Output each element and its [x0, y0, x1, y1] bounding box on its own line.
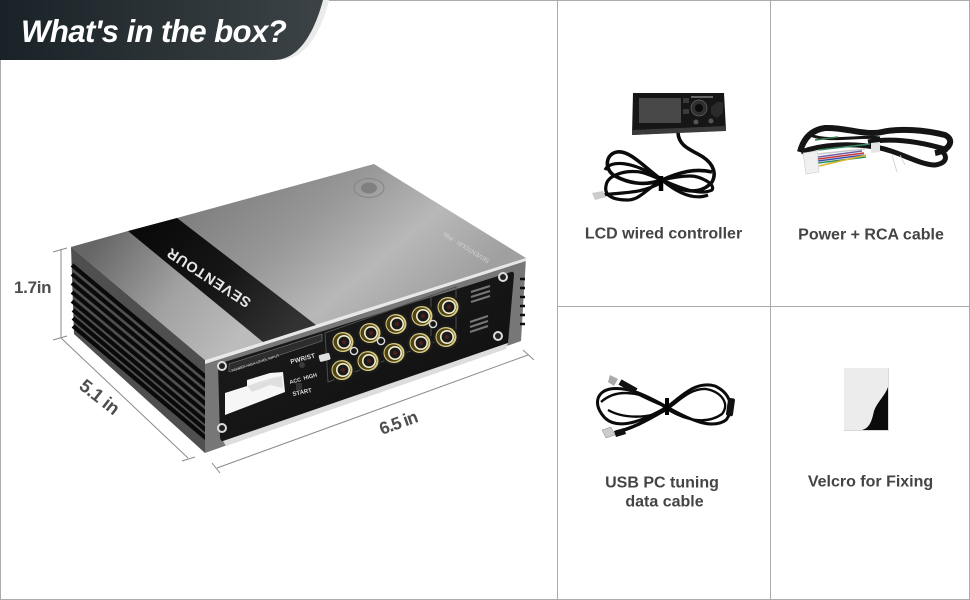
switch labels — [289, 353, 318, 398]
brand logo: SEVENTOUR — [164, 244, 254, 310]
panel: USB PC tuning data cable: data cable — [625, 494, 704, 510]
icon: controller — [592, 93, 726, 200]
switch labels: ACC — [289, 377, 302, 386]
dimension text: width: 6.5 in — [377, 407, 420, 439]
amplifier top face — [71, 164, 526, 360]
dimension: width — [212, 350, 534, 473]
title: What's in the box? — [21, 14, 287, 49]
dimension: depth — [61, 338, 195, 461]
switch labels: PWR/ST — [290, 353, 316, 366]
LED and switch — [296, 362, 305, 390]
dimension text: depth: 5.1 in — [76, 375, 124, 419]
dimension text: height: 1.7in — [14, 278, 51, 297]
RCA output block — [318, 287, 461, 382]
warning label strip — [217, 334, 322, 373]
model text: SEVENTOUR · P86 — [442, 230, 491, 263]
icon: harness — [800, 128, 950, 174]
panel: Velcro for Fixing — [808, 368, 933, 490]
black logo band — [128, 218, 316, 342]
switch labels: START — [292, 388, 313, 398]
white power connector — [225, 372, 285, 415]
panel: Power + RCA cable — [798, 128, 950, 244]
label: LCD wired controller — [585, 226, 742, 242]
icon: USB cable — [598, 375, 735, 438]
label: USB PC tuning — [605, 474, 719, 492]
amplifier left side with fins — [71, 247, 207, 453]
screws — [217, 272, 508, 433]
switch labels: HIGH — [303, 373, 318, 382]
round badge — [354, 178, 384, 198]
right fins — [520, 279, 525, 324]
panel: USB PC tuning data cable — [598, 375, 735, 510]
title banner — [0, 0, 329, 60]
amplifier front face — [205, 258, 526, 453]
panel: LCD wired controller — [585, 93, 742, 242]
product: amplifier — [71, 164, 526, 453]
label: Power + RCA cable — [798, 226, 944, 244]
icon: velcro — [844, 368, 889, 431]
vents — [470, 286, 490, 332]
dimension: height — [14, 248, 67, 340]
label: Velcro for Fixing — [808, 474, 933, 490]
warning label strip: POWER HIGH LEVEL INPUT — [231, 353, 281, 373]
